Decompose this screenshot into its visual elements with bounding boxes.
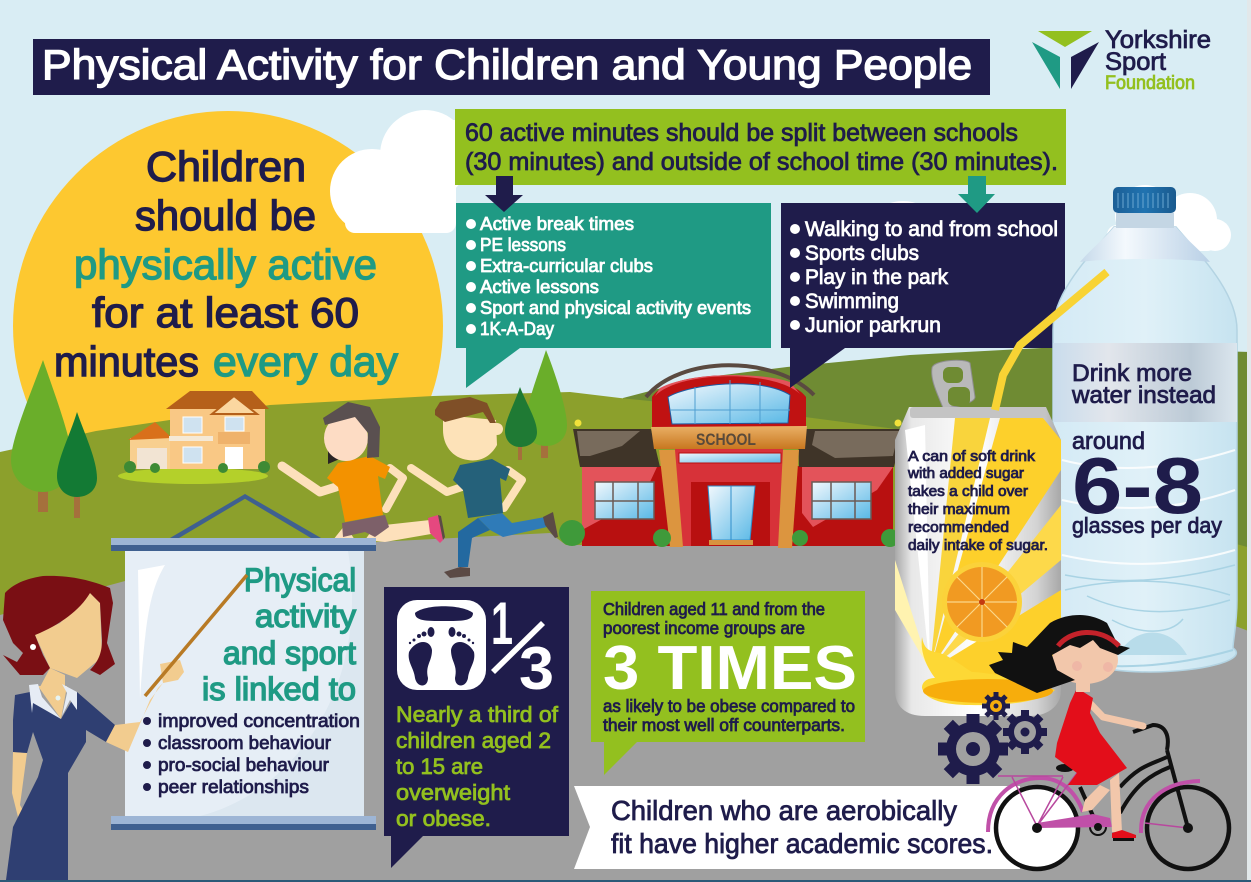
fraction one third: 3 [519,635,554,702]
panel: school activities [456,203,771,388]
scroll: physical activity: improved concentration [158,710,360,731]
callout: 60 active minutes split [455,109,1066,185]
bottle text: around [1072,428,1145,455]
heading: be physically active: minutes [54,338,199,385]
panel: outside school activities: Sports clubs [805,241,919,265]
panel: outside school activities: Walking to and from school [805,217,1058,241]
panel: school activities: Active lessons [480,276,599,297]
can text: A can of soft drink [908,449,1036,465]
heading: be physically active: Children [146,143,306,190]
can text: their maximum [908,502,1010,518]
panel: outside school activities: Junior parkrun [805,313,941,337]
panel: school activities: PE lessons [480,234,566,255]
callout: 3 times: poorest income groups are [603,618,805,638]
can text: daily intake of sugar. [908,538,1048,554]
cycling girl [988,615,1229,869]
callout: 3 times: 3 TIMES [603,634,857,703]
can text: recommended [908,520,1009,536]
clouds [330,110,1231,251]
panel: school activities: 1K-A-Day [480,318,555,339]
drinking straw [995,272,1107,410]
panel: school activities: Extra-curricular clubs [480,255,653,276]
scroll: physical activity: Physical [244,562,356,598]
panel: one third overweight: overweight [396,780,510,805]
icon: weighing scale [397,600,486,690]
scroll: physical activity: and sport [223,635,356,671]
bottle text: 6-8 [1072,441,1203,530]
panel: one third overweight: Nearly a third of [396,702,559,727]
logo: Yorkshire Sport Foundation: Foundation [1105,73,1195,94]
title banner: Physical Activity for Children and Young People [42,41,972,88]
heading: be physically active: physically active [74,241,377,288]
sun [13,111,443,541]
banner: aerobically fit: fit have higher academic scores. [611,828,993,859]
teacher [3,575,247,880]
banner: aerobically fit [574,786,1020,869]
logo: Yorkshire Sport Foundation: Sport [1105,48,1166,76]
fraction one third: 1 [491,590,513,657]
callout: 3 times: as likely to be obese compared to [603,696,855,716]
right edge line [1247,0,1251,880]
school sign: SCHOOL [696,430,756,449]
heading: be physically active [54,143,398,385]
callout: 3 times: Children aged 11 and from the [603,599,825,619]
can text: takes a child over [908,484,1028,500]
bottom edge line [0,880,1251,882]
running girl [282,402,445,543]
scroll: physical activity: peer relationships [158,776,309,797]
panel: one third overweight: to 15 are [396,754,483,779]
can text [907,449,1048,554]
bottle text: water instead [1071,382,1216,409]
scroll: physical activity: classroom behaviour [158,732,331,753]
callout: 3 times [591,591,865,775]
road [0,533,1251,882]
can text: with added sugar [907,466,1024,482]
arrow: to outside panel [958,176,995,213]
hills [0,347,1251,700]
heading: be physically active: every day [213,338,398,385]
scroll: physical activity: is linked to [202,671,356,707]
panel: outside school activities: Play in the park [805,265,948,289]
logo: Yorkshire Sport Foundation: Yorkshire [1105,26,1211,54]
panel: outside school activities: Swimming [805,289,899,313]
water bottle [1053,187,1237,672]
tree: left large [11,360,72,512]
bottle text: glasses per day [1072,513,1222,538]
bottle text [1071,360,1222,538]
panel: school activities: Sport and physical activity events [480,297,751,318]
heading: be physically active: should be [135,192,316,239]
panel: school activities: Active break times [480,213,634,234]
gears icon [938,692,1047,784]
logo: Yorkshire Sport Foundation [1032,26,1211,94]
callout: 60 active minutes split: 60 active minutes should be split between schools [465,119,1018,147]
panel: one third overweight: or obese. [396,806,491,831]
panel: one third overweight [384,587,569,868]
soft drink can [895,360,1061,716]
callout: 60 active minutes split: (30 minutes) and outside of school time (30 minutes). [465,148,1058,176]
scroll: physical activity: pro-social behaviour [158,754,329,775]
scroll: physical activity [111,494,376,830]
scroll: physical activity: activity [255,598,356,634]
tree: left small [57,412,97,518]
panel: one third overweight: children aged 2 [396,728,551,753]
running boy [411,397,558,578]
panel: outside school activities [781,203,1065,388]
tree: back large [525,350,567,458]
callout: 3 times: their most well off counterparts. [603,715,845,735]
tree: back small [505,387,537,460]
fraction one third [491,590,554,702]
bottle text: Drink more [1072,360,1192,387]
banner: aerobically fit: Children who are aerobically [611,795,957,826]
house [118,391,270,484]
arrow: to school panel [485,176,523,212]
heading: be physically active: for at least 60 [92,289,359,336]
school [559,365,903,548]
